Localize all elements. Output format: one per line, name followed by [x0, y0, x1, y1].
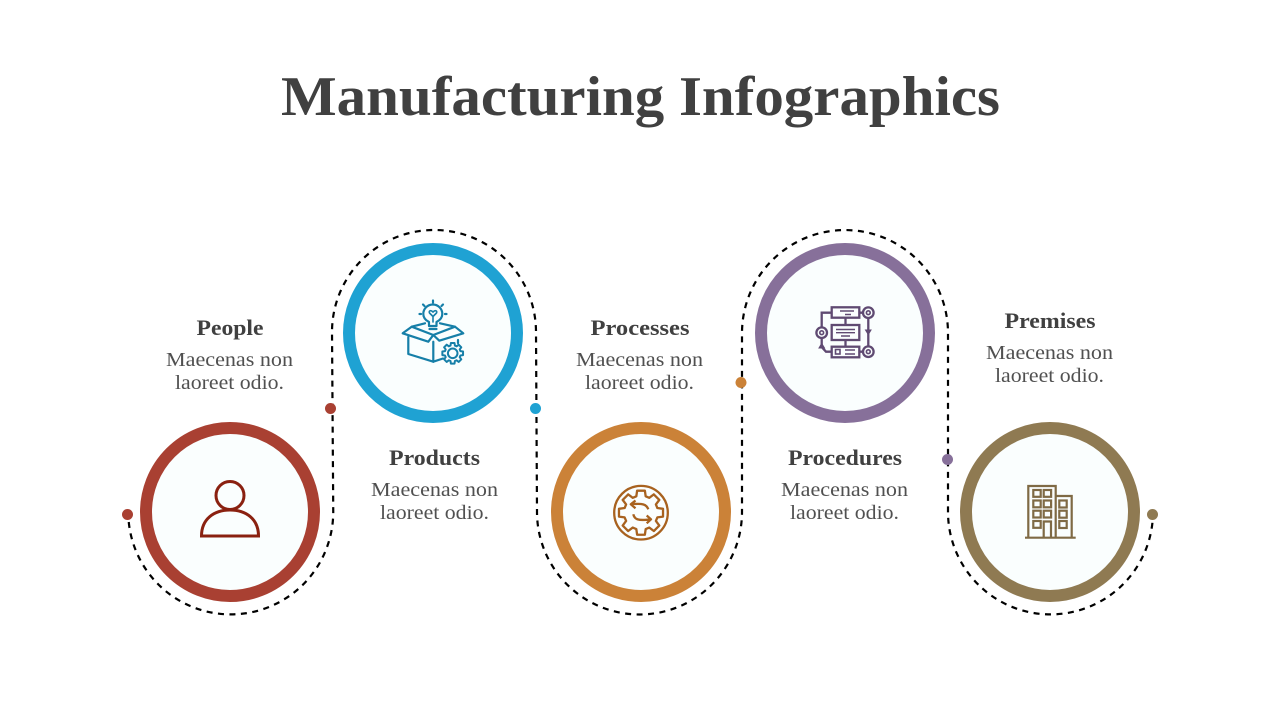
text: processes: laoreet odio. — [585, 372, 694, 394]
connector dots — [122, 377, 1158, 520]
text: products: Maecenas non — [371, 479, 498, 501]
icon: flow diagram — [816, 307, 874, 357]
text: premises: laoreet odio. — [995, 365, 1104, 387]
icon: buildings — [1025, 486, 1076, 538]
circle: products — [349, 249, 517, 417]
dashed connector path — [129, 230, 1152, 614]
text: procedures — [781, 445, 908, 524]
text: premises: Maecenas non — [986, 342, 1113, 364]
text: procedures: laoreet odio. — [790, 502, 899, 524]
icon: box with light bulb and gear — [403, 300, 463, 364]
text: processes — [576, 315, 703, 394]
text: procedures: Maecenas non — [781, 479, 908, 501]
text: procedures: Procedures — [788, 445, 902, 470]
text: people: Maecenas non — [166, 349, 293, 371]
text: people — [166, 315, 293, 394]
title: Manufacturing Infographics — [281, 66, 1000, 128]
text: products: laoreet odio. — [380, 502, 489, 524]
icon: gear with arrows — [614, 486, 668, 540]
text: products — [371, 445, 498, 524]
text: products: Products — [389, 445, 480, 470]
circle: processes — [557, 428, 725, 596]
circle: people — [146, 428, 314, 596]
text: processes: Maecenas non — [576, 349, 703, 371]
text: people: laoreet odio. — [175, 372, 284, 394]
circle: premises — [966, 428, 1134, 596]
text: processes: Processes — [590, 315, 690, 340]
text: people: People — [196, 315, 264, 340]
text: premises: Premises — [1004, 308, 1096, 333]
icon: person — [202, 482, 258, 536]
text: premises — [986, 308, 1113, 387]
circle: procedures — [761, 249, 929, 417]
